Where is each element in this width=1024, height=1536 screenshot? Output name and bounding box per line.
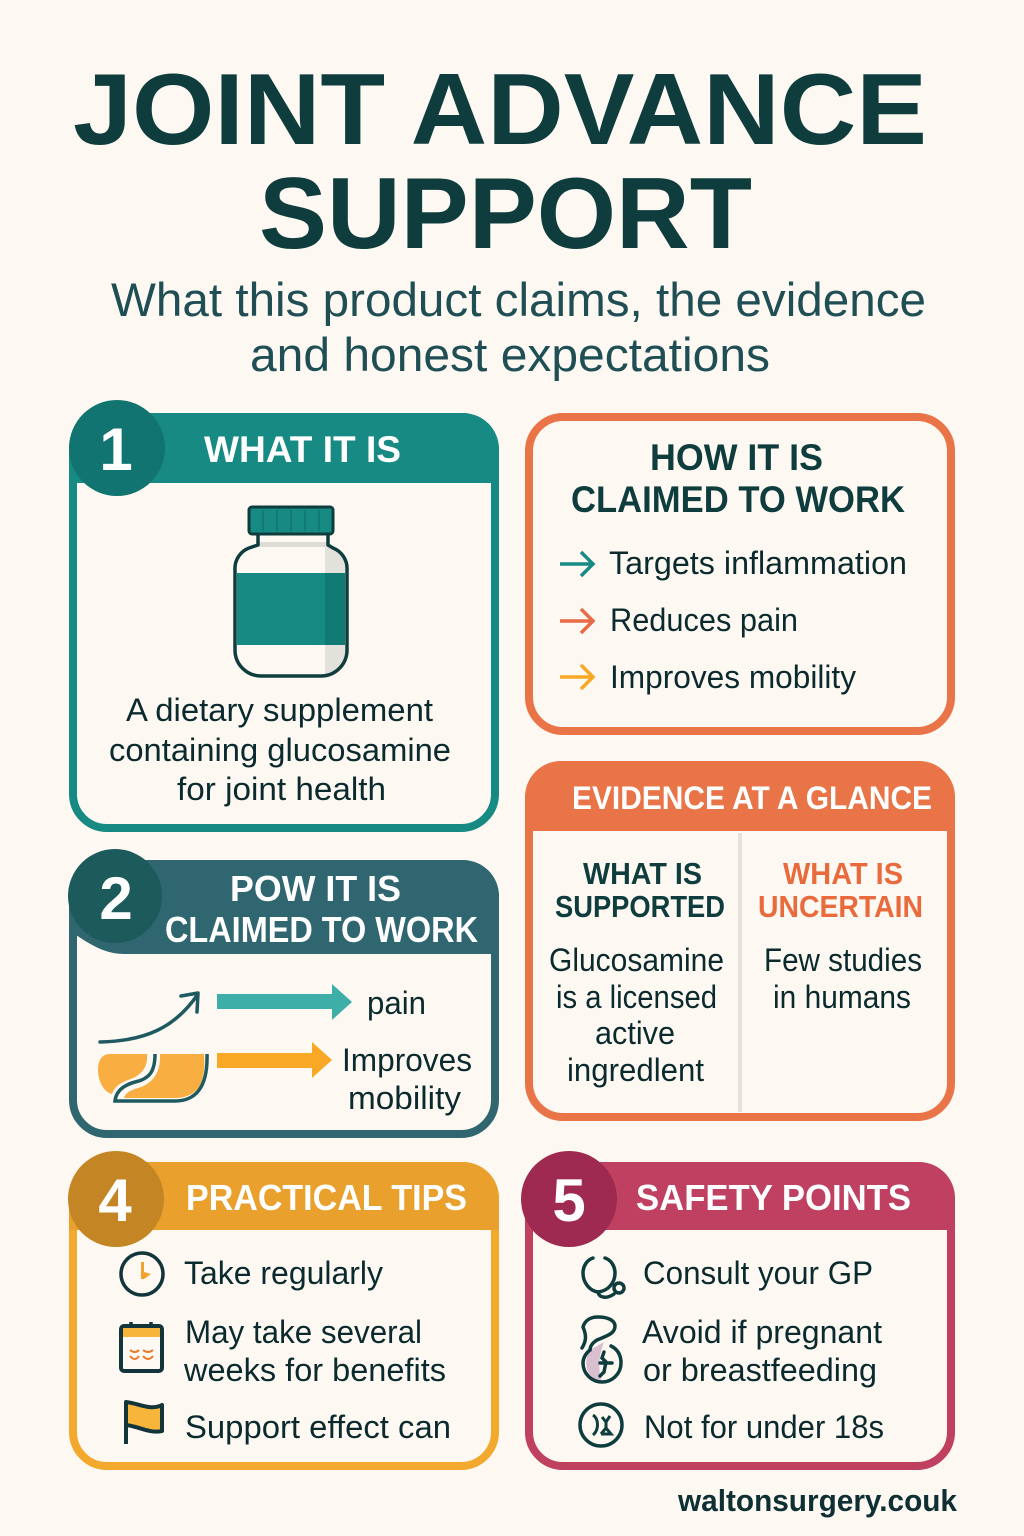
icon: curved upward arrow (100, 993, 198, 1042)
icon: clock (121, 1253, 163, 1295)
column: what is uncertain: UNCERTAIN (758, 889, 923, 924)
tip: may take several weeks (183, 1314, 446, 1388)
arrow: teal to pain (217, 984, 352, 1020)
icon: flag (126, 1402, 162, 1444)
panel: pow it is claimed to work (68, 849, 499, 1134)
heading: practical tips: PRACTICAL TIPS (186, 1177, 467, 1218)
column: what is supported: ingredlent (567, 1052, 704, 1088)
number badge 5: 5 (552, 1167, 586, 1234)
footer url: waltonsurgery.couk (677, 1483, 958, 1518)
heading: pow it is claimed to work (165, 868, 478, 950)
number badge 4: 4 (98, 1167, 132, 1234)
panel: safety points (521, 1151, 955, 1466)
arrow: coral (560, 609, 593, 633)
description text (109, 692, 451, 807)
tip: consult your gp: Consult your GP (643, 1255, 873, 1291)
subtitle: and honest expectations (250, 328, 770, 381)
arrow: amber to improves mobility (217, 1042, 332, 1078)
title: SUPPORT (259, 158, 752, 270)
column: what is supported (549, 856, 725, 1088)
description text: A dietary supplement (126, 692, 433, 728)
icon: supplement bottle (235, 507, 347, 676)
tip: may take several weeks: weeks for benefits (183, 1352, 446, 1388)
arrow: teal (560, 552, 593, 576)
tip: take regularly: Take regularly (184, 1255, 383, 1291)
label: pain: pain (367, 985, 426, 1021)
icon: calendar (121, 1322, 162, 1371)
tip: support effect: Support effect can (185, 1409, 451, 1445)
description text: containing glucosamine (109, 732, 451, 768)
number badge 4 (68, 1151, 164, 1247)
column: what is supported: Glucosamine (549, 942, 724, 978)
panel: practical tips (68, 1151, 499, 1466)
subtitle: What this product claims, the evidence (111, 273, 926, 326)
icon: not for under 18s (580, 1404, 622, 1446)
heading: what it is: WHAT IT IS (204, 429, 401, 470)
column: what is uncertain: in humans (773, 979, 911, 1015)
heading: pow it is claimed to work: CLAIMED TO WORK (165, 909, 478, 950)
number badge 5 (521, 1151, 617, 1247)
icon: stethoscope (583, 1258, 624, 1297)
heading: safety points: SAFETY POINTS (636, 1177, 911, 1218)
number badge 1: 1 (99, 416, 133, 483)
arrow: amber (560, 665, 593, 689)
panel: what it is (69, 400, 499, 828)
column: what is uncertain (758, 856, 923, 1015)
column: what is supported: WHAT IS (583, 856, 702, 891)
panel: how it is claimed to work (529, 417, 951, 731)
icon: pregnant woman (582, 1317, 621, 1382)
heading: how it is claimed to work (571, 437, 905, 520)
number badge 2: 2 (99, 865, 133, 932)
label: improves mobility (342, 1042, 472, 1116)
column: what is supported: SUPPORTED (555, 889, 725, 924)
tip: may take several weeks: May take several (185, 1314, 422, 1350)
subtitle (111, 273, 926, 381)
label: improves mobility: mobility (348, 1080, 461, 1116)
tip: not for under 18s: Not for under 18s (644, 1409, 884, 1445)
title: JOINT ADVANCE (73, 54, 927, 166)
icon: joint (98, 1054, 207, 1101)
description text: for joint health (177, 771, 386, 807)
column: what is supported: active (595, 1015, 675, 1051)
heading: evidence at a glance: EVIDENCE AT A GLANCE (572, 780, 932, 816)
title (73, 54, 927, 270)
claim: reduces pain: Reduces pain (610, 602, 798, 638)
heading: how it is claimed to work: HOW IT IS (650, 437, 823, 478)
heading: how it is claimed to work: CLAIMED TO WORK (571, 479, 905, 520)
heading: pow it is claimed to work: POW IT IS (230, 868, 401, 909)
column: what is uncertain: WHAT IS (783, 856, 903, 891)
number badge 2 (68, 849, 162, 943)
label: improves mobility: Improves (342, 1042, 472, 1078)
column: what is uncertain: Few studies (764, 942, 922, 978)
tip: avoid if pregnant (642, 1314, 882, 1388)
claim: targets inflammation: Targets inflammation (609, 545, 907, 581)
claim: improves mobility: Improves mobility (610, 659, 856, 695)
tip: avoid if pregnant: or breastfeeding (643, 1352, 877, 1388)
column: what is supported: is a licensed (556, 979, 717, 1015)
tip: avoid if pregnant: Avoid if pregnant (642, 1314, 882, 1350)
number badge 1 (69, 400, 165, 496)
panel: evidence at a glance (525, 761, 955, 1117)
